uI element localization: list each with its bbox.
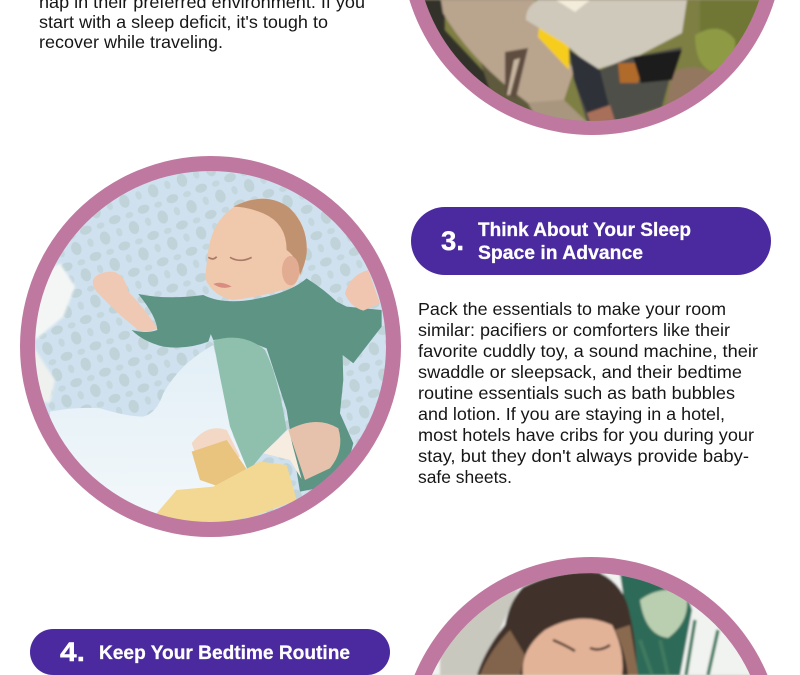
tip 3 title: Space in Advance	[478, 243, 643, 264]
leg under pale overlay	[213, 338, 287, 472]
tip 4 heading pill	[30, 629, 390, 675]
thigh	[288, 422, 340, 480]
tip 4 number: 4.	[60, 637, 85, 667]
text block: tip 2 body: start with a sleep deficit, it's tough to	[39, 12, 328, 32]
text block: tip 3 body	[418, 299, 758, 487]
text block: tip 3 body: and lotion. If you are staying in a hotel,	[418, 404, 725, 424]
text block: tip 3 body: favorite cuddly toy, a sound machine, their	[418, 341, 758, 361]
sheet	[33, 170, 388, 525]
text block: tip 2 body	[39, 0, 365, 52]
blanket	[50, 345, 253, 525]
photo: mother with dark wavy hair	[414, 557, 768, 675]
text block: tip 3 body: safe sheets.	[418, 467, 512, 487]
text block: tip 3 body: Pack the essentials to make your room	[418, 299, 726, 319]
bright patches	[33, 263, 75, 340]
foot and socks	[192, 428, 240, 457]
right hand	[345, 270, 380, 311]
tip 3 title: Think About Your Sleep	[478, 220, 691, 241]
text block: tip 3 body: routine essentials such as bath bubbles	[418, 383, 735, 403]
torso and right sleeve	[203, 278, 382, 492]
text block: tip 3 body: stay, but they don't always provide baby-	[418, 446, 749, 466]
head	[205, 199, 307, 300]
tip 3 number: 3.	[441, 226, 464, 256]
tip 3 heading pill	[411, 207, 771, 275]
tip 4 title: Keep Your Bedtime Routine	[99, 643, 350, 664]
text block: tip 2 body: recover while traveling.	[39, 32, 223, 52]
photo: sleeping newborn	[20, 156, 401, 537]
text block: tip 3 body: most hotels have cribs for you during your	[418, 425, 754, 445]
left arm	[93, 272, 157, 331]
text block: tip 3 body: swaddle or sleepsack, and their bedtime	[418, 362, 742, 382]
text block: tip 3 body: similar: pacifiers or comforters like their	[418, 320, 730, 340]
tip 3 title	[478, 220, 691, 264]
photo: parent carrying baby outdoors	[409, 0, 775, 135]
